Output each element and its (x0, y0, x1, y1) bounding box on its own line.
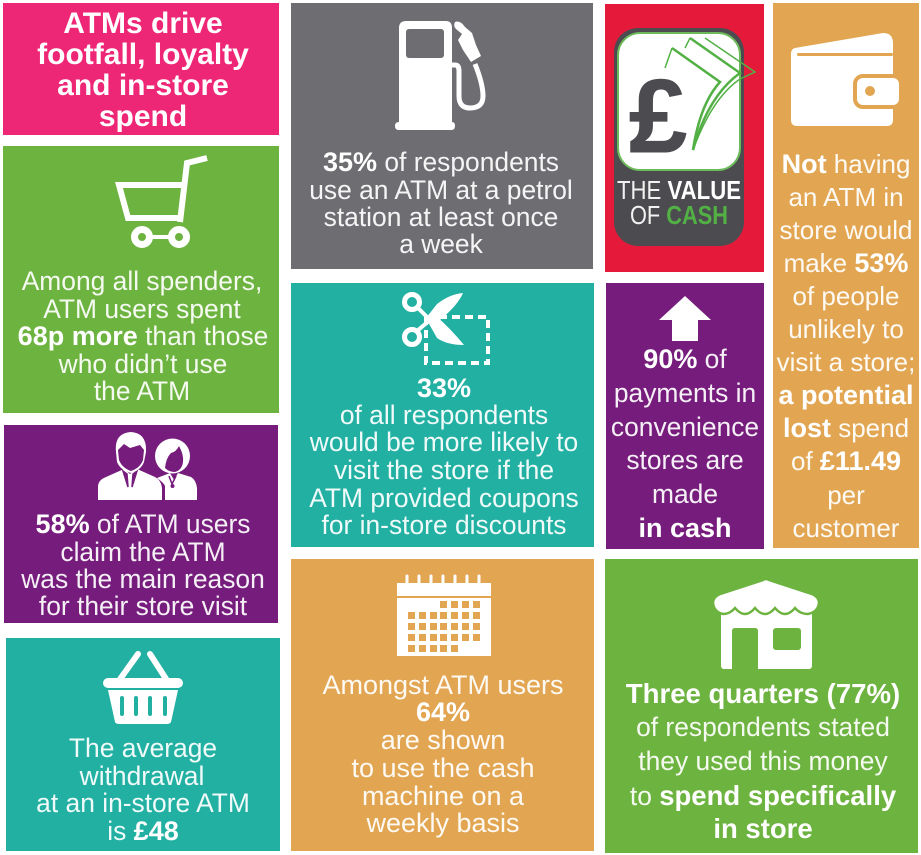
text: spenders: who didn’t use (58, 349, 227, 379)
text: no ATM: unlikely to (788, 314, 904, 344)
text: main reason (20, 509, 265, 621)
text: spenders: the ATM (94, 376, 190, 406)
heading (37, 7, 249, 133)
icon: calendar (397, 576, 491, 656)
panel: payments in cash stat (606, 283, 764, 549)
text: withdrawal: withdrawal (79, 761, 204, 791)
text: three quarters: Three quarters (77%) (626, 678, 900, 709)
text: payments: payments in (614, 378, 756, 408)
text: main reason: claim the ATM (60, 537, 226, 567)
logo: white card (618, 33, 740, 170)
panel: main reason stat (4, 425, 278, 623)
text: petrol station (309, 147, 573, 259)
text: coupons: of all respondents (340, 400, 548, 430)
heading: spend (99, 100, 187, 133)
text: spenders: ATM users spent (43, 294, 241, 324)
text: petrol station: 35% of respondents (323, 147, 559, 177)
panel: The Value of Cash logo (605, 4, 764, 272)
text: weekly use: Amongst ATM users (322, 670, 564, 700)
text: no ATM (777, 149, 915, 543)
text: withdrawal (36, 733, 250, 846)
panel: average withdrawal stat (6, 638, 280, 851)
text: payments: convenience (611, 412, 759, 442)
panel: three quarters stat (605, 559, 918, 853)
logo wordmark: THE VALUE (617, 175, 741, 205)
text: weekly use: to use the cash (351, 753, 535, 783)
icon: up arrow (659, 296, 711, 341)
text: three quarters: to spend specifically (630, 780, 897, 811)
text: spenders: Among all spenders, (22, 266, 262, 296)
logo wordmark: OF CASH (630, 200, 728, 230)
text: petrol station: station at least once (324, 202, 558, 232)
text: no ATM: of £11.49 (791, 446, 901, 476)
text: coupons: 33% (417, 373, 471, 403)
heading: and in-store (57, 69, 229, 102)
icon: petrol pump (395, 21, 483, 130)
text: weekly use (322, 670, 564, 838)
text: coupons: would be more likely to (309, 427, 578, 457)
heading: footfall, loyalty (37, 38, 249, 71)
text: payments: 90% of (643, 344, 727, 374)
heading: ATMs drive (63, 7, 223, 40)
icon: banknotes (665, 38, 755, 150)
icon: shop (713, 579, 819, 669)
text: payments: in cash (638, 513, 732, 543)
text: weekly use: weekly basis (365, 808, 520, 838)
text: coupons (309, 373, 579, 540)
text: main reason: was the main reason (20, 564, 265, 594)
text: three quarters: of respondents stated (636, 712, 890, 742)
text: three quarters (626, 678, 900, 844)
icon: people (98, 432, 197, 500)
panel: coupons stat (291, 283, 594, 547)
text: main reason: 58% of ATM users (36, 509, 250, 539)
text: withdrawal: is £48 (107, 816, 179, 846)
text: spenders: 68p more than those (18, 321, 268, 351)
text: payments: made (652, 479, 718, 509)
text: no ATM: make 53% (784, 248, 908, 278)
text: weekly use: 64% (416, 697, 470, 727)
text: three quarters: they used this money (638, 746, 888, 776)
text: petrol station: use an ATM at a petrol (309, 175, 573, 205)
text: no ATM: of people (793, 281, 899, 311)
icon: wallet (791, 33, 901, 126)
panel: petrol station stat (291, 3, 593, 269)
text: no ATM: customer (793, 513, 900, 543)
text: weekly use: are shown (381, 725, 505, 755)
text: no ATM: lost spend (783, 413, 909, 443)
panel: shopping cart stat (3, 146, 279, 413)
text: three quarters: in store (713, 813, 813, 844)
text: no ATM: a potential (778, 380, 914, 410)
text: no ATM: visit a store; (777, 347, 915, 377)
icon: scissors and coupon (404, 293, 488, 363)
icon: pound sign: £ (629, 59, 687, 175)
text: weekly use: machine on a (362, 781, 525, 811)
text: no ATM: Not having (782, 149, 910, 179)
text: petrol station: a week (399, 229, 484, 259)
panel: weekly use stat (291, 559, 594, 851)
panel: title (3, 3, 279, 135)
logo: dark badge (614, 28, 744, 246)
text: coupons: visit the store if the (334, 455, 554, 485)
text: payments: stores are (626, 445, 744, 475)
text: main reason: for their store visit (39, 591, 248, 621)
text: coupons: for in-store discounts (322, 510, 566, 540)
text: spenders (18, 266, 268, 406)
text: no ATM: an ATM in (788, 182, 904, 212)
panel: no ATM stat (773, 3, 919, 548)
icon: shopping basket (103, 654, 183, 724)
text: withdrawal: The average (69, 733, 217, 763)
logo wordmark (617, 175, 741, 230)
text: no ATM: store would (780, 215, 912, 245)
text: withdrawal: at an in-store ATM (36, 788, 250, 818)
text: no ATM: per (827, 480, 865, 510)
text: payments (611, 344, 759, 543)
icon: shopping cart (119, 158, 207, 244)
text: coupons: ATM provided coupons (309, 483, 579, 513)
